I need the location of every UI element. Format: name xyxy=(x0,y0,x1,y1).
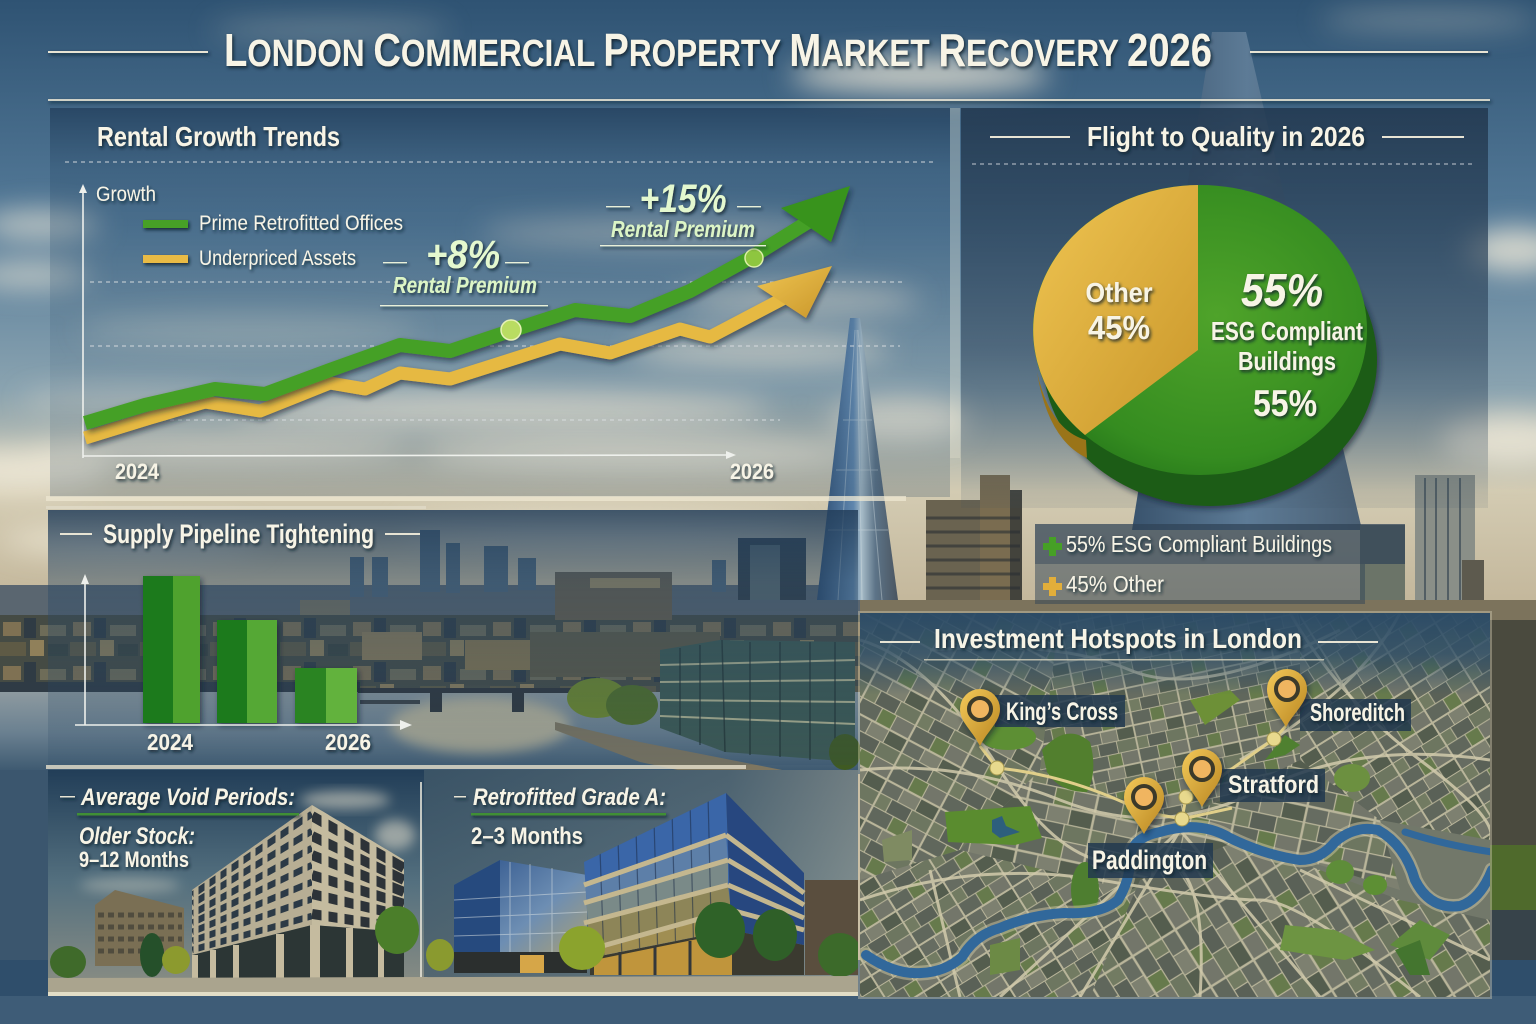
older stock office building xyxy=(192,790,404,980)
heading: Rental Growth Trends xyxy=(97,121,340,152)
street trees xyxy=(50,902,862,978)
hotspot: Paddington: Paddington xyxy=(1092,845,1207,875)
pie label: ESG compliant: Buildings xyxy=(1238,346,1336,376)
pie label: ESG compliant: ESG Compliant xyxy=(1211,316,1363,346)
bar 2025 xyxy=(217,620,277,723)
map heading strip xyxy=(860,613,1490,695)
bar 2026 xyxy=(295,668,357,723)
pie label: ESG compliant xyxy=(1211,264,1363,424)
parks xyxy=(882,690,1450,975)
pie label: ESG compliant: 55% xyxy=(1241,264,1323,316)
connector lines xyxy=(980,726,1286,826)
pavement xyxy=(48,976,858,992)
bar 2024 xyxy=(143,576,200,723)
bar chart axes xyxy=(75,574,412,730)
background The Shard large xyxy=(1132,32,1362,530)
hotspot: Stratford xyxy=(1182,749,1325,807)
callout +8%: +8% xyxy=(426,233,500,277)
clouds xyxy=(0,10,1536,556)
axis label: Growth xyxy=(96,183,156,206)
main roads xyxy=(860,613,1491,997)
river reflection xyxy=(0,692,860,774)
pie legend: 55% ESG Compliant Buildings xyxy=(1066,531,1332,557)
panel: supply pipeline tightening xyxy=(46,506,858,765)
main title: LONDON COMMERCIAL PROPERTY MARKET RECOVERY 2026 xyxy=(224,24,1212,76)
pie chart xyxy=(1033,185,1377,506)
pie legend: 45% Other xyxy=(1066,571,1164,597)
pie label: other: Other xyxy=(1086,277,1153,308)
embankment xyxy=(555,722,858,808)
line: underpriced assets xyxy=(85,266,832,438)
text: older stock xyxy=(79,823,195,872)
bottom water xyxy=(0,770,48,1024)
heading: Investment Hotspots in London xyxy=(934,623,1302,654)
heading: retrofitted grade A: Retrofitted Grade A: xyxy=(473,784,666,811)
background bridge xyxy=(358,688,583,712)
right side towers xyxy=(860,475,1536,970)
data point 2026 xyxy=(745,249,763,267)
line: prime retrofitted offices xyxy=(85,186,850,423)
waterfront trees xyxy=(567,678,861,770)
text: 2-3 months: 2–3 Months xyxy=(471,823,583,850)
legend xyxy=(143,212,403,270)
pie label: other: 45% xyxy=(1088,309,1150,346)
legend icon green xyxy=(1043,537,1062,556)
city street map xyxy=(860,613,1492,997)
text: older stock: 9–12 Months xyxy=(79,847,189,872)
panel: flight to quality xyxy=(961,108,1488,508)
park lake xyxy=(992,816,1020,838)
retrofitted Grade A glass building xyxy=(584,793,858,975)
x label 2026: 2026 xyxy=(730,459,774,484)
bar label 2024: 2024 xyxy=(147,729,193,755)
hotspot: King's Cross xyxy=(960,689,1125,746)
bar label 2026: 2026 xyxy=(325,729,371,755)
text: older stock: Older Stock: xyxy=(79,823,195,850)
pie legend xyxy=(1035,524,1405,604)
callout +15%: Rental Premium xyxy=(611,216,755,242)
legend: Underpriced Assets xyxy=(199,247,356,270)
distant skyline xyxy=(0,530,860,625)
River Thames xyxy=(866,827,1492,973)
callout +8% xyxy=(380,233,548,306)
hotspot: Paddington xyxy=(1088,777,1213,878)
x label 2024: 2024 xyxy=(115,459,160,484)
legend: Prime Retrofitted Offices xyxy=(199,212,403,235)
panel: investment hotspots map xyxy=(858,611,1492,999)
pie label: other xyxy=(1086,277,1153,346)
heading: average void periods: Average Void Periods: xyxy=(80,784,295,811)
waterfront glass building xyxy=(660,640,855,762)
heading: Supply Pipeline Tightening xyxy=(103,519,374,549)
data point 2025 xyxy=(501,320,521,340)
hotspot: Stratford: Stratford xyxy=(1228,771,1319,799)
divider line xyxy=(420,782,422,982)
hotspot: Shoreditch: Shoreditch xyxy=(1310,699,1405,727)
chart axes xyxy=(79,184,736,459)
hotspot: King's Cross: King’s Cross xyxy=(1006,698,1118,726)
hotspot: Shoreditch xyxy=(1267,669,1411,731)
callout +15% xyxy=(600,177,766,246)
heading: Flight to Quality in 2026 xyxy=(1087,121,1365,152)
panel: void periods comparison xyxy=(46,765,862,996)
glass office left xyxy=(454,860,587,973)
The Shard foreground xyxy=(817,318,898,600)
legend icon yellow xyxy=(1043,577,1062,596)
callout +15%: +15% xyxy=(640,177,726,221)
callout +8%: Rental Premium xyxy=(393,272,537,298)
pie label: ESG compliant: 55% xyxy=(1253,383,1317,424)
panel: rental growth trends xyxy=(46,108,960,501)
older background building xyxy=(95,890,184,966)
